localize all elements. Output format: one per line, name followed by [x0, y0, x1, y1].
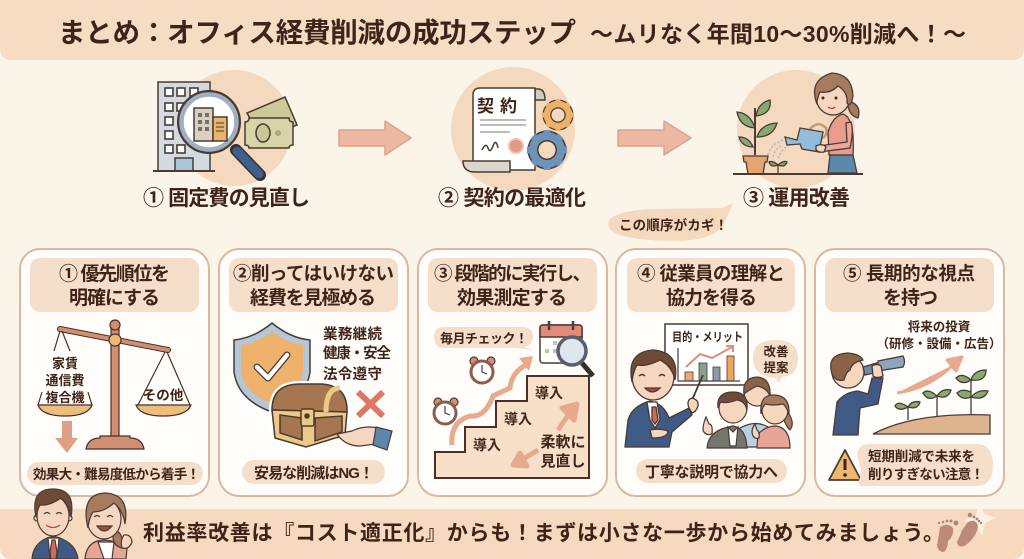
icon: listening employees: [703, 377, 792, 448]
step label 1: ① 固定費の見直し: [143, 187, 310, 210]
callout pill: tip 4: 丁寧な説明で協力へ: [645, 463, 778, 481]
text: left pan items: 通信費: [45, 373, 85, 388]
arrow: flexible review down: [513, 450, 538, 466]
panel: tip 2 keep expenses: [219, 249, 408, 496]
arrow: step 2 to step 3: [618, 121, 691, 155]
heading: tip 2: ②削ってはいけない: [233, 263, 394, 284]
text: right pan item: その他: [143, 388, 184, 403]
title banner: まとめ：オフィス経費削減の成功ステップ: [58, 17, 576, 48]
text: future investment: [876, 319, 1002, 351]
arrow head: rising progress: [519, 356, 533, 371]
heading: tip 5: ⑤ 長期的な視点: [843, 263, 975, 284]
heading: tip 3: 効果測定する: [457, 287, 567, 309]
icon: alarm clock 2: [470, 357, 495, 383]
callout pill: tip 1: [27, 462, 203, 485]
icon: treasure chest: [272, 384, 347, 447]
chart: presentation board: [665, 324, 748, 385]
icon: presenter: [625, 350, 703, 447]
callout: order is key: [608, 203, 733, 241]
callout: improvement proposal: [753, 340, 798, 383]
callout pill: tip 5: 削りすぎない注意！: [868, 466, 984, 482]
icon: red cross: [358, 392, 383, 416]
chart: staircase: [435, 376, 589, 478]
callout: order is key: この順序がカギ！: [619, 217, 728, 233]
heading: tip 2: 経費を見極める: [250, 287, 376, 309]
title banner: [0, 0, 1024, 60]
arrow: step 1 to step 2: [339, 121, 411, 155]
heading: tip 4: [627, 258, 795, 312]
heading: tip 5: [825, 258, 994, 312]
text: must keep list: [323, 325, 392, 383]
footer banner: 利益率改善は『コスト適正化』からも！まずは小さな一歩から始めてみましょう。: [143, 522, 944, 545]
icon: hill with sprouts: [873, 370, 990, 434]
step label 2: ② 契約の最適化: [438, 187, 586, 210]
text: left pan items: 家賃: [52, 356, 78, 371]
icon: person with telescope: [831, 353, 904, 435]
chart: presentation board: 目的・メリット: [672, 329, 743, 344]
heading: tip 1: [30, 258, 199, 312]
callout: monthly check: [434, 327, 534, 350]
heading: tip 5: を持つ: [883, 287, 938, 309]
chart: staircase: 導入: [535, 385, 563, 401]
callout: monthly check: 毎月チェック！: [440, 331, 528, 346]
heading: tip 3: [428, 258, 597, 312]
icon: building under magnifier with money: [153, 70, 297, 186]
panel: tip 4 employee cooperation: [616, 249, 805, 496]
title banner: 〜ムリなく年間10〜30%削減へ！〜: [590, 21, 966, 47]
text: flexible review: 柔軟に: [540, 433, 586, 451]
callout pill: tip 2: [242, 460, 385, 484]
arrow: rising future: [897, 357, 962, 393]
icon: contract with gears: [451, 67, 575, 191]
text: left pan items: 複合機: [45, 390, 85, 405]
chart: staircase: 導入: [504, 411, 532, 427]
text: flexible review: 見直し: [540, 452, 586, 470]
arrow: flexible review up: [558, 404, 577, 430]
text: future investment: （研修・設備・広告）: [876, 336, 1002, 351]
heading: tip 3: ③ 段階的に実行し、: [434, 263, 591, 284]
callout: improvement proposal: 改善: [763, 344, 789, 359]
text: flexible review: [540, 433, 586, 470]
chart: staircase: 導入: [473, 437, 501, 453]
icon: shield: [234, 323, 310, 412]
icon: footprints with sparkle: [937, 503, 996, 552]
icon: warning triangle: [829, 450, 861, 480]
icon: woman watering a plant: [733, 70, 863, 188]
chart: balance scale: [38, 320, 191, 449]
text: left pan items: [45, 356, 85, 405]
icon: two smiling staff: [32, 489, 132, 559]
text: must keep list: 健康・安全: [323, 344, 392, 362]
callout pill: tip 5: [857, 444, 993, 486]
heading: tip 1: 明確にする: [69, 287, 160, 309]
arrow: rising progress: [452, 365, 526, 445]
panel: tip 3 gradual steps: [418, 249, 607, 496]
icon: hand on chest: [337, 427, 392, 450]
icon: alarm clock 1: [434, 398, 458, 424]
panel: tip 5 long-term view: [815, 249, 1004, 496]
step label 3: ③ 運用改善: [743, 187, 850, 210]
heading: tip 2: [229, 258, 398, 312]
text: future investment: 将来の投資: [908, 319, 971, 334]
arrow: down: [55, 421, 78, 453]
heading: tip 1: ① 優先順位を: [59, 263, 170, 285]
icon: calendar and magnifier: [540, 321, 593, 376]
callout pill: tip 1: 効果大・難易度低から着手！: [33, 466, 200, 482]
heading: tip 4: 協力を得る: [666, 287, 757, 309]
callout: improvement proposal: 提案: [763, 360, 789, 375]
text: must keep list: 業務継続: [323, 325, 382, 343]
text: must keep list: 法令遵守: [323, 365, 382, 383]
callout pill: tip 4: [636, 459, 787, 483]
heading: tip 4: ④ 従業員の理解と: [637, 263, 785, 284]
callout pill: tip 2: 安易な削減はNG！: [254, 464, 374, 482]
panel: tip 1 priorities: [20, 249, 209, 496]
footer banner: [0, 509, 1024, 559]
icon: contract with gears: 契約: [477, 97, 517, 116]
callout pill: tip 5: 短期削減で未来を: [868, 448, 975, 464]
